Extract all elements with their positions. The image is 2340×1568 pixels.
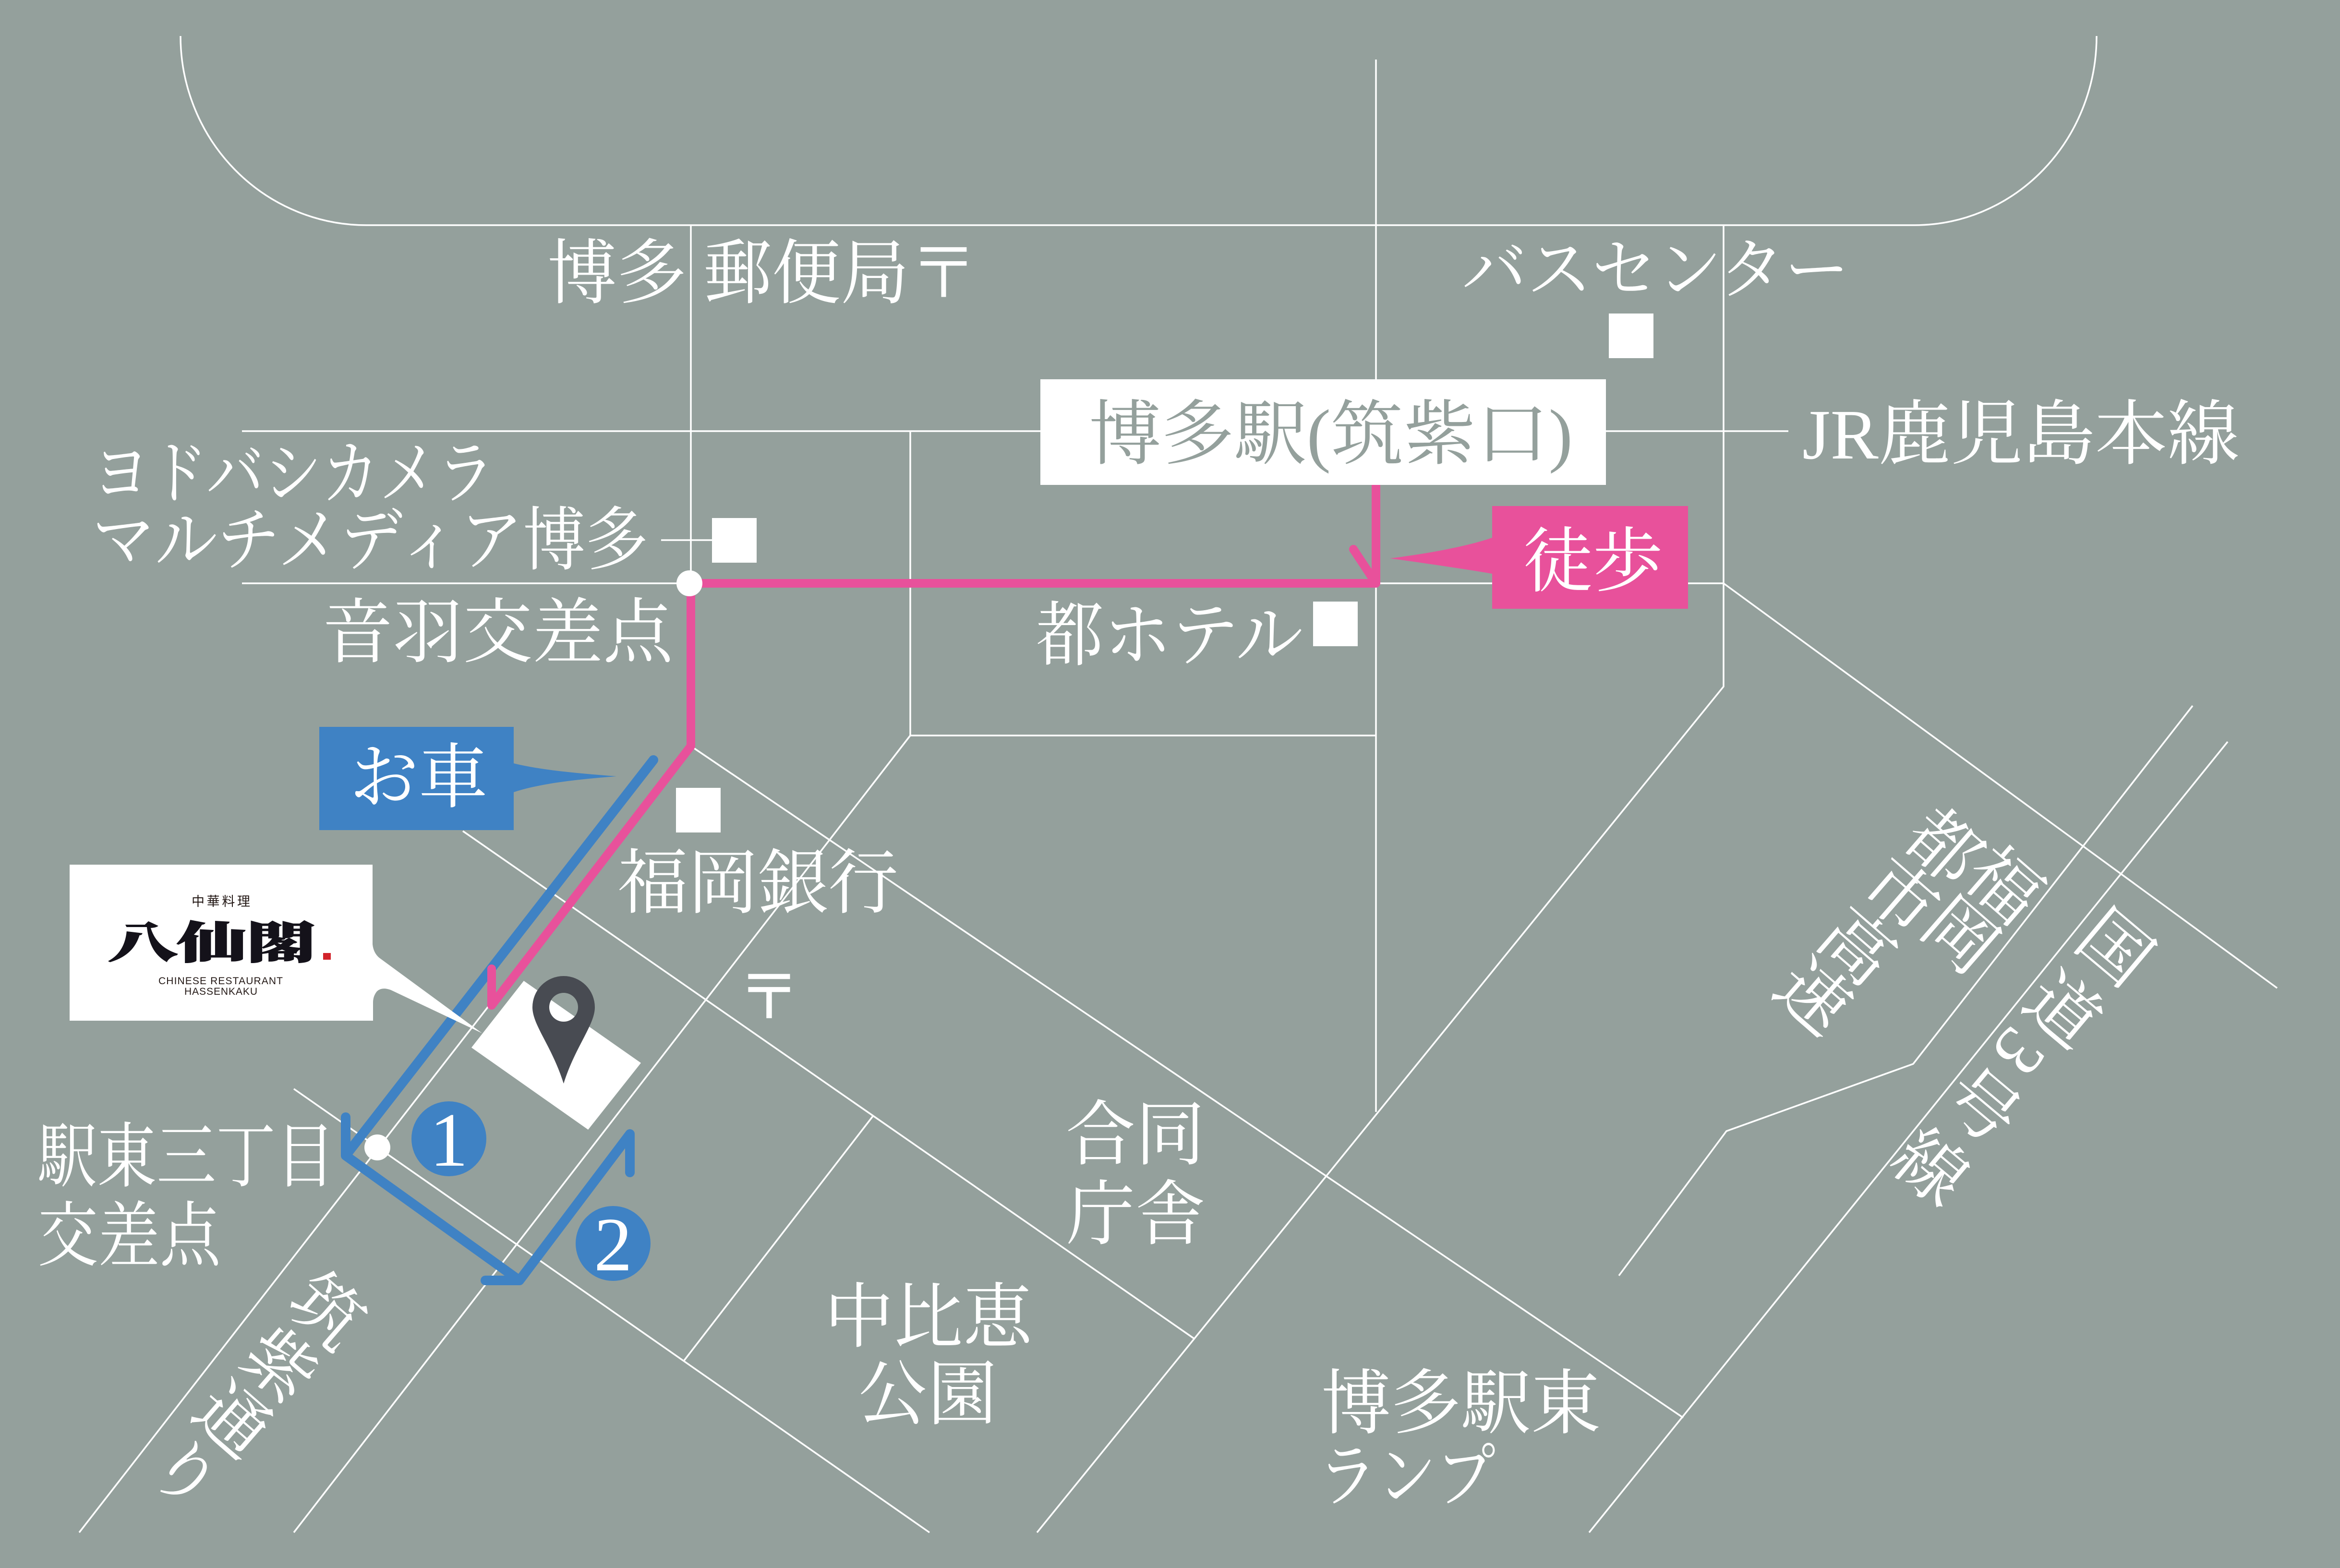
logo seal xyxy=(323,953,331,960)
logo text: Chinese cuisine: 中華料理 xyxy=(192,894,250,909)
label: JR Kagoshima line: JR鹿児島本線 xyxy=(1802,396,2239,474)
label: Miyako Hotel: 都ホテル xyxy=(1036,597,1303,675)
label: Hakata Station East ramp: 博多駅東 xyxy=(1321,1365,1601,1444)
label: bus center: バスセンター xyxy=(1462,233,1849,308)
label: Otowa intersection: 音羽交差点 xyxy=(323,594,675,673)
landmark square: Yodobashi xyxy=(712,518,757,563)
label: Godo government building: 庁舎 xyxy=(1066,1176,1205,1254)
walk callout xyxy=(1390,506,1688,609)
car callout xyxy=(319,727,616,830)
label: Yodobashi Camera xyxy=(92,436,648,579)
label: Ekihigashi 3-chome intersection: 交差点 xyxy=(37,1197,222,1276)
label: Nakahie park: 中比恵 xyxy=(824,1279,1034,1357)
step marker 2: 2 xyxy=(594,1202,632,1287)
label: Hakata Station East ramp xyxy=(1318,1365,1601,1516)
landmark square: bus center xyxy=(1609,314,1653,358)
intersection dot: Otowa xyxy=(676,570,702,596)
label: Yodobashi Camera: マルチメディア博多 xyxy=(92,503,648,579)
logo text: Hassenkaku romaji: HASSENKAKU xyxy=(184,986,257,997)
post office mark: 〒 xyxy=(738,962,800,1032)
label: Godo government building xyxy=(1066,1096,1205,1254)
landmark square: Fukuoka Bank xyxy=(676,788,721,832)
station box: Hakata Station Chikushi exit: 博多駅(筑紫口) xyxy=(1089,396,1573,474)
label: Ekihigashi 3-chome intersection: 駅東三丁目 xyxy=(36,1118,335,1197)
step marker 2 xyxy=(576,1202,651,1287)
label: Fukuoka urban expressway: 都市高速 xyxy=(1759,788,1994,1042)
walking route (pink) xyxy=(492,485,1376,1005)
label: Nakahie park xyxy=(824,1279,1034,1435)
station box: Hakata Station Chikushi exit xyxy=(1040,379,1606,485)
building site xyxy=(471,981,641,1130)
logo: Hassenkaku: 八仙閣 xyxy=(108,908,316,971)
label: National Route 3: 国道3号線 xyxy=(1868,889,2165,1222)
car callout: お車 xyxy=(350,739,488,818)
logo text: Chinese Restaurant: CHINESE RESTAURANT xyxy=(158,976,283,987)
label: Fukuoka urban expressway: 福岡 xyxy=(1906,826,2055,981)
label: post office: 郵便局〒 xyxy=(703,235,978,314)
intersection dot: Ekihigashi 3-chome xyxy=(364,1134,390,1160)
car route (blue) xyxy=(346,760,653,1280)
label: Yodobashi Camera: ヨドバシカメラ xyxy=(92,436,495,513)
label: Godo government building: 合同 xyxy=(1066,1096,1205,1175)
label: Hakata: 博多 xyxy=(547,235,687,314)
landmark square: Miyako Hotel xyxy=(1313,602,1358,646)
step marker 1 xyxy=(411,1097,486,1182)
walk callout: 徒歩 xyxy=(1523,523,1663,602)
label: Ekihigashi 3-chome intersection xyxy=(36,1118,335,1276)
label: Chikushi street: 筑紫通り xyxy=(128,1252,377,1522)
restaurant logo callout xyxy=(70,865,482,1033)
label: Fukuoka Bank: 福岡銀行 xyxy=(618,844,898,923)
label: Hakata Station East ramp: ランプ xyxy=(1318,1439,1496,1516)
label: Nakahie park: 公園 xyxy=(858,1356,997,1435)
map pin icon xyxy=(532,976,595,1084)
step marker 1: 1 xyxy=(430,1097,468,1182)
